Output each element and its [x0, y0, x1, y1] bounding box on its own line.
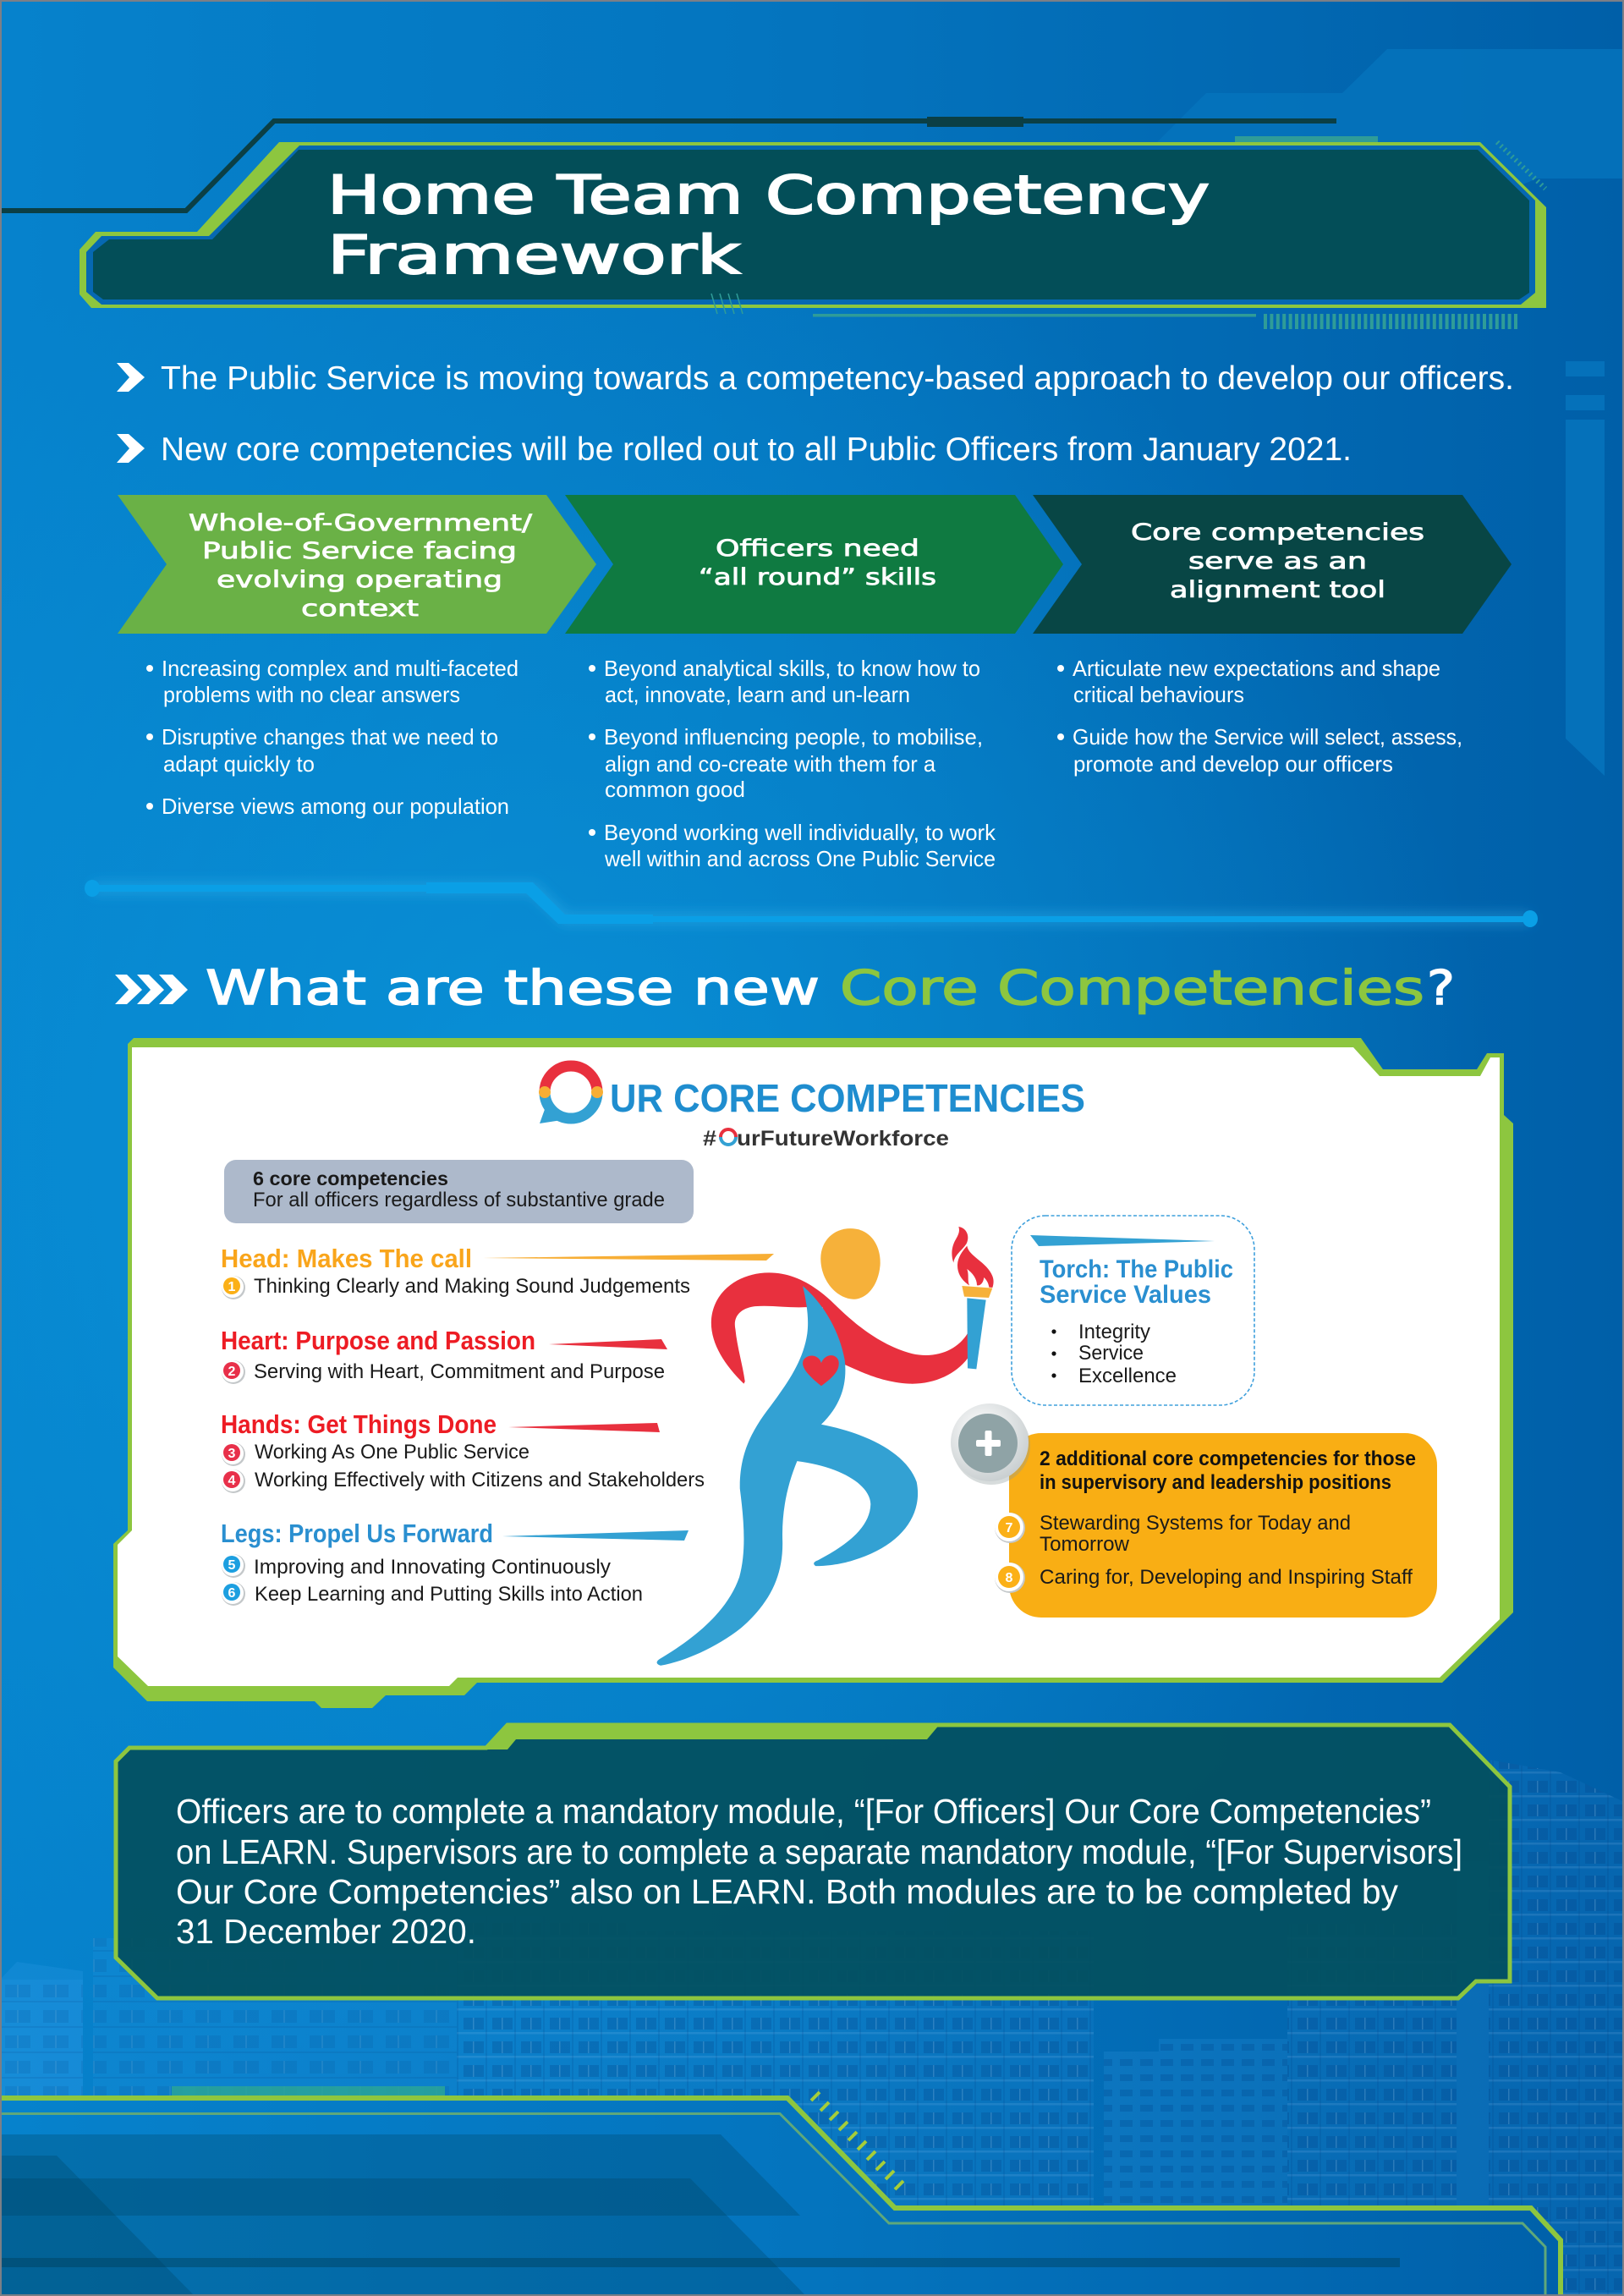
- panel: completion notice: [116, 1723, 1510, 1998]
- runner figure with torch: [657, 1227, 994, 1666]
- chevron: whole-of-government context: Whole-of-Government/: [189, 510, 533, 536]
- legs group: 6: [228, 1586, 236, 1601]
- bullet list: context: Diverse views among our population: [162, 794, 509, 819]
- chevron: whole-of-government context: context: [301, 596, 419, 622]
- chevron: whole-of-government context: evolving operating: [217, 567, 502, 593]
- chevron: alignment tool: alignment tool: [1170, 577, 1385, 603]
- chevron: alignment tool: Core competencies: [1131, 519, 1424, 546]
- callout: supervisory competencies: Caring for, Developing and Inspiring Staff: [1040, 1566, 1413, 1589]
- intro statement 2: New core competencies will be rolled out to all Public Officers from January 2021.: [161, 431, 1352, 468]
- hands group: 4: [228, 1474, 236, 1488]
- callout: supervisory competencies: Tomorrow: [1040, 1533, 1130, 1556]
- logo: our core competencies: [539, 1066, 1085, 1123]
- title banner: [0, 117, 1546, 321]
- callout: torch values: [1012, 1216, 1254, 1405]
- title text: Home Team Competency: [327, 164, 1210, 226]
- decorative right side bars: [1566, 361, 1605, 776]
- legs group: Improving and Innovating Continuously: [254, 1556, 611, 1579]
- callout: torch values: Service: [1078, 1342, 1144, 1365]
- bullet list: context: problems with no clear answers: [163, 682, 460, 707]
- bullet list: context: adapt quickly to: [163, 751, 315, 777]
- grey label: 6 core competencies: For all officers regardless of substantive grade: [253, 1189, 665, 1211]
- section heading: What are these new: [206, 961, 820, 1016]
- decorative top-right panel shape: [1133, 49, 1622, 220]
- section heading: ?: [1427, 961, 1455, 1016]
- legs group: [221, 1519, 689, 1606]
- bullet list: skills: well within and across One Public Service: [604, 846, 996, 871]
- callout: supervisory competencies: [995, 1433, 1437, 1618]
- bullet list: skills: Beyond working well individually, to work: [604, 820, 996, 845]
- apartment buildings background: [0, 1760, 1624, 2296]
- bullet list: skills: act, innovate, learn and un-learn: [605, 682, 910, 707]
- heart group: Serving with Heart, Commitment and Purpose: [254, 1360, 665, 1383]
- lower circuit panel: [0, 2086, 1561, 2296]
- chevron: all round skills: [565, 495, 1063, 634]
- callout: torch values: Integrity: [1078, 1321, 1150, 1343]
- hands group: 3: [228, 1447, 236, 1461]
- heart group: [221, 1326, 667, 1384]
- bullet list: skills: Beyond influencing people, to mobilise,: [604, 724, 983, 750]
- heart group: 2: [228, 1365, 236, 1379]
- legs group: Keep Learning and Putting Skills into Action: [255, 1583, 643, 1606]
- bullet list: skills: Beyond analytical skills, to know how to: [604, 656, 980, 681]
- hashtag: #: [703, 1127, 716, 1151]
- callout: torch values: Excellence: [1078, 1365, 1177, 1387]
- head group: 1: [228, 1280, 236, 1294]
- logo: our core competencies: UR CORE COMPETENCIES: [610, 1076, 1085, 1120]
- bullet list: context: [146, 656, 518, 819]
- bullet list: alignment: Articulate new expectations and shape: [1073, 656, 1440, 681]
- icon: plus button: [951, 1403, 1030, 1485]
- grey label: 6 core competencies: [224, 1160, 694, 1223]
- section heading: [115, 961, 1455, 1016]
- hands group: Hands: Get Things Done: [221, 1409, 497, 1439]
- bullet list: alignment: promote and develop our officers: [1073, 751, 1393, 777]
- notice text: Our Core Competencies” also on LEARN. Both modules are to be completed by: [176, 1872, 1398, 1911]
- heart group: Heart: Purpose and Passion: [221, 1326, 535, 1355]
- chevron: whole-of-government context: [118, 495, 596, 634]
- legs group: Legs: Propel Us Forward: [221, 1519, 493, 1548]
- section heading: Core Competencies: [840, 961, 1424, 1016]
- chevron: whole-of-government context: Public Service facing: [202, 538, 517, 564]
- glowing divider line: [85, 880, 1538, 927]
- head group: Thinking Clearly and Making Sound Judgements: [254, 1275, 690, 1298]
- bullet list: skills: align and co-create with them for a: [605, 751, 936, 777]
- notice text: Officers are to complete a mandatory module, “[For Officers] Our Core Competencies”: [176, 1792, 1431, 1831]
- panel: our core competencies: [113, 1038, 1513, 1708]
- hands group: Working Effectively with Citizens and Stakeholders: [255, 1469, 705, 1491]
- intro statement 1: The Public Service is moving towards a competency-based approach to develop our officers.: [161, 360, 1514, 397]
- chevron: all round skills: Officers need: [716, 536, 919, 562]
- callout: torch values: Service Values: [1040, 1281, 1211, 1309]
- callout: torch values: Torch: The Public: [1040, 1255, 1233, 1283]
- callout: supervisory competencies: in supervisory and leadership positions: [1040, 1471, 1391, 1494]
- bullet list: context: Disruptive changes that we need to: [162, 724, 498, 750]
- title text: [327, 164, 1210, 286]
- bullet list: skills: common good: [605, 777, 745, 802]
- callout: supervisory competencies: Stewarding Systems for Today and: [1040, 1512, 1351, 1535]
- hands group: [221, 1409, 705, 1493]
- hands group: Working As One Public Service: [255, 1441, 529, 1464]
- callout: supervisory competencies: 8: [1006, 1571, 1013, 1585]
- notice text: on LEARN. Supervisors are to complete a separate mandatory module, “[For Supervisors]: [176, 1832, 1462, 1871]
- callout: supervisory competencies: 2 additional core competencies for those: [1040, 1447, 1416, 1470]
- head group: [221, 1244, 774, 1299]
- callout: supervisory competencies: 7: [1006, 1521, 1013, 1535]
- head group: Head: Makes The call: [221, 1244, 472, 1273]
- title text: Framework: [327, 224, 740, 286]
- bullet list: alignment: critical behaviours: [1073, 682, 1244, 707]
- notice text: 31 December 2020.: [176, 1912, 476, 1951]
- chevron: alignment tool: [1033, 495, 1512, 634]
- chevron: all round skills: “all round” skills: [699, 564, 936, 590]
- bullet list: context: Increasing complex and multi-faceted: [162, 656, 518, 681]
- legs group: 5: [228, 1558, 236, 1573]
- bullet list: alignment: [1057, 656, 1462, 777]
- chevron: alignment tool: serve as an: [1188, 548, 1367, 574]
- notice text: [176, 1792, 1462, 1951]
- grey label: 6 core competencies: 6 core competencies: [253, 1167, 448, 1189]
- bullet list: alignment: Guide how the Service will select, assess,: [1073, 724, 1462, 750]
- bullet list: skills: [589, 656, 996, 871]
- hashtag: urFutureWorkforce: [737, 1127, 949, 1151]
